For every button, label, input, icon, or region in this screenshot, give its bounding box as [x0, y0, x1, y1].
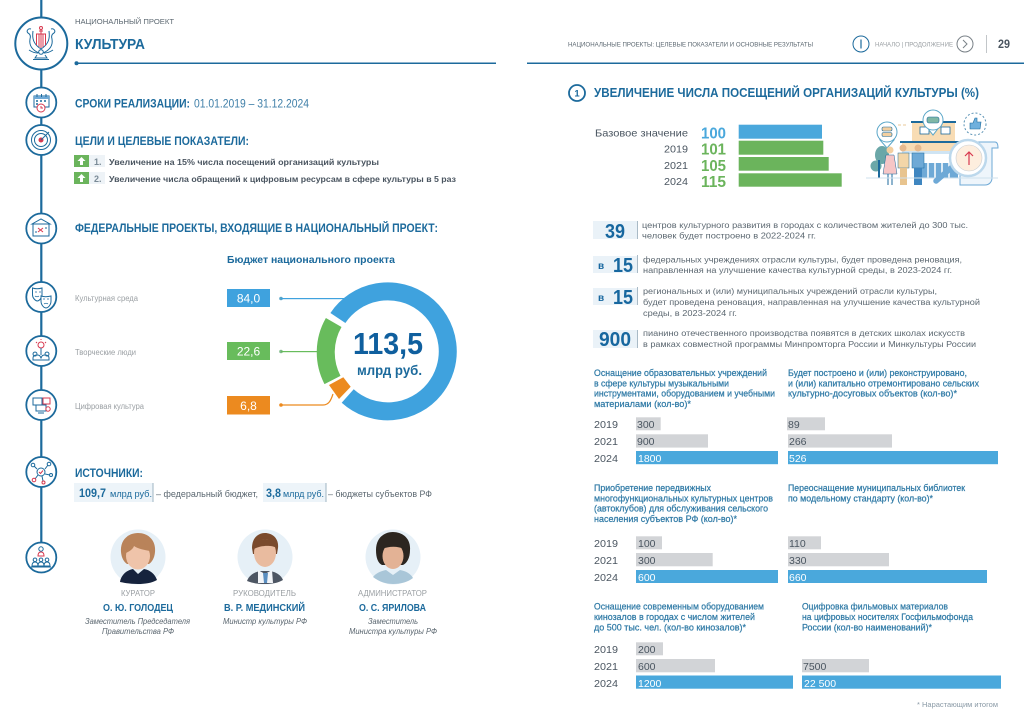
header rule: [527, 62, 1024, 64]
chart: libraries: 330: [789, 555, 807, 567]
segment: 6,8 orange: [329, 377, 351, 399]
person: administrator: АДМИНИСТРАТОР: [358, 589, 427, 598]
sources: regional budgets: – бюджеты субъектов РФ: [328, 489, 432, 500]
chart: film digitisation: 22 500: [804, 678, 836, 690]
person: head: В. Р. МЕДИНСКИЙ: [224, 601, 305, 614]
donut total: млрд руб.: [357, 363, 422, 378]
bar chart: visits: 115: [701, 174, 726, 191]
bar chart: visits: 105: [701, 158, 726, 175]
chart: mobile cultural centres: 100: [638, 538, 656, 550]
chart: mobile cultural centres: 300: [638, 555, 656, 567]
heading: sources: ИСТОЧНИКИ:: [75, 466, 143, 480]
label: creative people: Творческие люди: [75, 348, 136, 357]
chart: mobile cultural centres: 2024: [594, 572, 618, 584]
person: curator: Правительства РФ: [102, 627, 175, 636]
chart: rural cultural facilities: 526: [789, 453, 807, 465]
segment: 22,6 green: [326, 322, 334, 380]
fact: 15 regional institutions: региональных и (или) муниципальных учреждений отрасли культуры,: [643, 286, 937, 296]
chart: rural cultural facilities: и (или) капитально отремонтировано сельских: [788, 378, 980, 388]
chart: educational equipment: [594, 368, 778, 465]
fact: 15 regional institutions: [593, 286, 980, 318]
chart: educational equipment: в сфере культуры музыкальными: [594, 378, 729, 388]
chart: cinemas: до 500 тыс. чел. (кол-во кинозалов)*: [594, 622, 747, 632]
chart: cinemas: 2021: [594, 661, 618, 673]
sources: federal budget: [74, 483, 258, 502]
connector: blue: [279, 297, 345, 300]
chart: educational equipment: инструментами, оборудованием и учебными: [594, 389, 775, 399]
chart: mobile cultural centres: 2019: [594, 538, 618, 550]
fact: 900 pianos: [593, 328, 976, 351]
person: head: Министр культуры РФ: [223, 617, 308, 626]
panel: left page: [15, 0, 496, 636]
fact: 15 regional institutions: 15: [613, 287, 633, 309]
chart: cinemas: 600: [638, 661, 656, 673]
timeline spine: [40, 0, 42, 545]
heading: budget: Бюджет национального проекта: [227, 254, 395, 266]
chart: rural cultural facilities: [787, 368, 998, 465]
segment: 84,0 blue: [338, 291, 448, 411]
chart: rural cultural facilities: Будет построено и (или) реконструировано,: [788, 368, 967, 378]
sources: regional budgets: 3,8: [266, 488, 282, 500]
sources: federal budget: млрд руб.: [110, 489, 152, 500]
running header: НАЧАЛО | ПРОДОЛЖЕНИЕ: [875, 42, 953, 48]
chart: libraries: Переоснащение муниципальных библиотек: [788, 483, 965, 493]
sources: federal budget: 109,7: [79, 488, 106, 500]
chart: mobile cultural centres: 2021: [594, 555, 618, 567]
chart: cinemas: 2024: [594, 678, 618, 690]
chart: educational equipment: 2021: [594, 436, 618, 448]
value box: 22,6: 22,6: [237, 344, 261, 358]
heading: national project: НАЦИОНАЛЬНЫЙ ПРОЕКТ: [75, 17, 174, 26]
fact: 39 centres: 39: [605, 221, 625, 243]
chart: educational equipment: 2019: [594, 419, 618, 431]
person: administrator: Министра культуры РФ: [349, 627, 438, 636]
donut total: [353, 326, 423, 378]
photo: [110, 530, 166, 584]
fact: 39 centres: человек будет построено в 2022-2024 гг.: [642, 230, 816, 240]
value box: 6,8: [227, 396, 270, 414]
bar chart: visits: 2019: [664, 144, 688, 156]
icon: calendar: [26, 88, 56, 118]
bar chart: visits: 2021: [664, 160, 688, 172]
chart: cinemas: 1200: [638, 678, 662, 690]
fact: 15 regional institutions: будет проведена реновация, направленная на улучшение качества культурной: [643, 297, 980, 307]
fact: 15 federal institutions: [593, 254, 962, 277]
person: curator: КУРАТОР: [121, 589, 155, 598]
footnote: * Нарастающим итогом: [917, 700, 998, 709]
chart: mobile cultural centres: Приобретение передвижных: [594, 483, 712, 493]
person: administrator: [349, 530, 438, 636]
icon: theatre masks: [26, 282, 56, 312]
chart: libraries: по модельному стандарту (кол-во)*: [788, 493, 934, 503]
sources: regional budgets: [263, 483, 432, 502]
chart: mobile cultural centres: [594, 483, 778, 584]
sources: federal budget: – федеральный бюджет,: [156, 489, 258, 500]
label: cultural environment: Культурная среда: [75, 294, 139, 303]
chart: film digitisation: 7500: [803, 661, 827, 673]
person: head: [223, 530, 308, 626]
goal 1: Увеличение на 15% числа посещений организаций культуры: [109, 157, 379, 167]
chart: libraries: [788, 483, 987, 584]
chart: educational equipment: Оснащение образовательных учреждений: [594, 368, 767, 378]
chart: cinemas: [594, 602, 793, 690]
icon: sources network: [26, 457, 56, 487]
donut chart: [326, 291, 448, 411]
header rule: [74, 61, 496, 65]
connector: green: [279, 350, 321, 353]
chart: libraries: 110: [789, 538, 806, 550]
running header: [568, 35, 1010, 53]
icon: people hierarchy: [26, 542, 56, 572]
icon: creative people: [26, 336, 56, 366]
heading: national project: [75, 17, 174, 53]
goal 2: Увеличение числа обращений к цифровым ресурсам в сфере культуры в 5 раз: [109, 174, 456, 184]
chart: mobile cultural centres: населения субъектов РФ (кол-во)*: [594, 514, 738, 524]
chart: educational equipment: 300: [637, 419, 655, 431]
chart: mobile cultural centres: (автоклубов) для обслуживания сельского: [594, 504, 768, 514]
chart: educational equipment: 1800: [638, 453, 662, 465]
heading: section 1: 1: [574, 88, 580, 100]
icon: federal projects building: [26, 214, 56, 244]
goal 1: 1.: [94, 157, 102, 167]
person: head: РУКОВОДИТЕЛЬ: [233, 589, 296, 598]
donut total: 113,5: [353, 326, 423, 361]
illustration: culture building, people and magnifier: [866, 110, 998, 185]
chart: cinemas: Оснащение современным оборудованием: [594, 602, 764, 612]
text: implementation dates: [75, 96, 309, 110]
fact: 39 centres: [593, 220, 968, 243]
fact: 15 regional institutions: среды, в 2023-2024 гг.: [643, 308, 737, 318]
chart: educational equipment: материалами (кол-во)*: [594, 399, 692, 409]
photo: [238, 530, 292, 584]
icon: target: [26, 125, 56, 155]
chart: mobile cultural centres: 600: [638, 572, 656, 584]
heading: section 1: УВЕЛИЧЕНИЕ ЧИСЛА ПОСЕЩЕНИЙ ОРГАНИЗАЦИЙ КУЛЬТУРЫ (%): [594, 85, 979, 100]
fact: 900 pianos: 900: [599, 329, 631, 351]
running header: 29: [998, 39, 1010, 51]
chart: rural cultural facilities: 266: [789, 436, 807, 448]
label: digital culture: Цифровая культура: [75, 402, 145, 411]
icon: digital culture screens: [26, 390, 56, 420]
chart: educational equipment: 900: [637, 436, 655, 448]
value box: 84,0: [227, 289, 270, 307]
fact: 15 federal institutions: в: [598, 261, 604, 272]
value box: 84,0: 84,0: [237, 292, 261, 306]
photo: [366, 530, 420, 584]
bar chart: visits: Базовое значение: [595, 128, 688, 140]
chart: rural cultural facilities: культурно-досуговых объектов (кол-во)*: [788, 389, 958, 399]
fact: 39 centres: центров культурного развития в городах с количеством жителей до 300 тыс.: [642, 220, 968, 230]
bar chart: visits: 100: [701, 126, 726, 142]
chart: educational equipment: 2024: [594, 453, 618, 465]
connector: orange: [279, 394, 333, 407]
running header: НАЦИОНАЛЬНЫЕ ПРОЕКТЫ: ЦЕЛЕВЫЕ ПОКАЗАТЕЛИ И ОСНОВНЫЕ РЕЗУЛЬТАТЫ: [568, 42, 813, 48]
value box: 6,8: 6,8: [240, 399, 257, 413]
goal 2: 2.: [94, 174, 102, 184]
panel: right page: [527, 35, 1024, 709]
heading: federal projects: ФЕДЕРАЛЬНЫЕ ПРОЕКТЫ, ВХОДЯЩИЕ В НАЦИОНАЛЬНЫЙ ПРОЕКТ:: [75, 220, 438, 235]
chart: film digitisation: на цифровых носителях Госфильмофонда: [802, 612, 973, 622]
bar chart: visits: 2024: [664, 176, 688, 188]
sources: regional budgets: млрд руб.: [283, 489, 324, 500]
bar chart: visits: [595, 125, 842, 191]
person: administrator: О. С. ЯРИЛОВА: [359, 603, 426, 614]
chart: film digitisation: Оцифровка фильмовых материалов: [802, 602, 948, 612]
text: implementation dates: 01.01.2019 – 31.12.2024: [194, 96, 309, 110]
chart: film digitisation: [802, 602, 1001, 690]
person: curator: Заместитель Председателя: [85, 617, 191, 626]
icon: lyre emblem: [15, 18, 67, 70]
person: administrator: Заместитель: [368, 617, 418, 626]
fact: 900 pianos: в рамках совместной программы Минпромторга России и Минкультуры России: [643, 339, 976, 349]
fact: 900 pianos: пианино отечественного производства появятся в детских школах искусств: [643, 328, 965, 338]
fact: 15 regional institutions: в: [598, 293, 604, 304]
heading: national project: КУЛЬТУРА: [75, 37, 145, 53]
fact: 15 federal institutions: 15: [613, 255, 633, 277]
chart: libraries: 660: [789, 572, 807, 584]
text: implementation dates: СРОКИ РЕАЛИЗАЦИИ:: [75, 96, 190, 110]
value box: 22,6: [227, 342, 270, 360]
fact: 15 federal institutions: направленная на улучшение качества культурной среды, в 2023-2024 гг.: [643, 265, 952, 275]
chart: cinemas: 2019: [594, 644, 618, 656]
person: curator: О. Ю. ГОЛОДЕЦ: [103, 603, 174, 614]
chart: mobile cultural centres: многофункциональных культурных центров: [594, 493, 773, 503]
chart: cinemas: кинозалов в городах с числом жителей: [594, 612, 755, 622]
fact: 15 federal institutions: федеральных учреждениях отрасли культуры, будет проведена реновация,: [643, 254, 962, 264]
chart: film digitisation: России (кол-во наименований)*: [802, 622, 933, 632]
bar chart: visits: 101: [701, 142, 726, 158]
person: curator: [85, 530, 191, 636]
chart: rural cultural facilities: 89: [788, 419, 800, 431]
heading: goals: ЦЕЛИ И ЦЕЛЕВЫЕ ПОКАЗАТЕЛИ:: [75, 134, 249, 148]
chart: cinemas: 200: [638, 644, 656, 656]
